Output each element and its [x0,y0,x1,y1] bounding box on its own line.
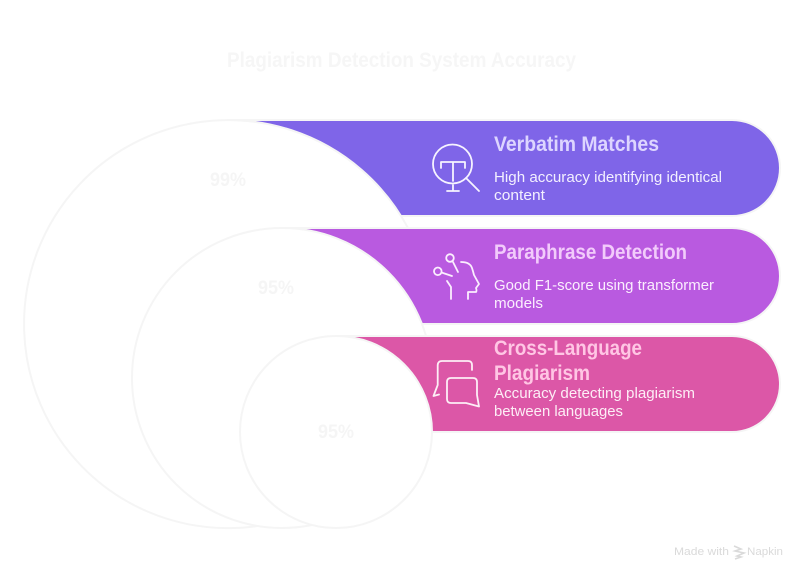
icon: speech bubbles [434,361,479,406]
panel: verbatim matches [228,120,780,216]
watermark text: napkin: Napkin [747,546,783,558]
icon: head with nodes [434,254,479,299]
value: 95% lower: 95% [318,422,354,443]
description: cross-language plagiarism: Accuracy detecting plagiarism [494,385,695,402]
panel: paraphrase detection [282,228,780,324]
watermark [674,546,783,559]
heading: paraphrase detection: Paraphrase Detection [494,241,687,264]
heading: verbatim matches: Verbatim Matches [494,133,659,156]
value: 95% upper: 95% [258,278,294,299]
panel: cross-language plagiarism [336,336,780,432]
description: cross-language plagiarism: between languages [494,403,623,420]
circle: 95% upper [132,228,432,528]
heading: cross-language plagiarism: Plagiarism [494,362,590,385]
title: Plagiarism Detection System Accuracy [227,49,576,72]
bar: paraphrase detection [282,228,780,324]
heading: cross-language plagiarism: Cross-Language [494,337,642,360]
description: paraphrase detection: models [494,295,543,312]
circle: 95% lower [240,336,432,528]
description: paraphrase detection: Good F1-score using transformer [494,277,714,294]
icon: napkin logo [734,546,744,559]
description: verbatim matches: content [494,187,546,204]
icon: magnifier over letter T [433,144,479,191]
bar: verbatim matches [228,120,780,216]
value: 99%: 99% [210,170,246,191]
description: verbatim matches: High accuracy identifying identical [494,169,722,186]
bar: cross-language plagiarism [336,336,780,432]
watermark text: made with: Made with [674,546,729,558]
